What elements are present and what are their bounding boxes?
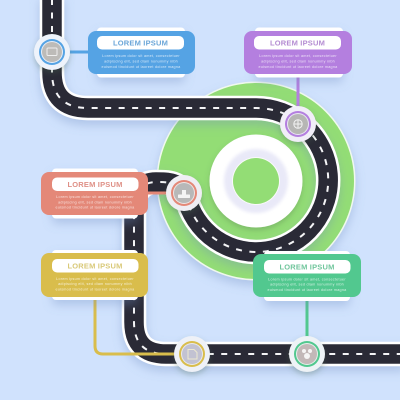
connector: green [306,295,308,346]
connector: blue [60,50,90,54]
panel: red [41,168,148,218]
panel: blue [88,28,195,78]
text block: Lorem ipsum dolor sit amet, consectetuer [102,54,180,58]
icon: document [188,350,197,359]
green island [156,82,356,280]
connector: purple [296,72,300,116]
text block: euismod tincidunt ut laoreet dolore magna [268,288,347,292]
text block: euismod tincidunt ut laoreet dolore magna [56,206,135,210]
heading: LOREM IPSUM [67,262,123,270]
text block [259,54,338,69]
heading: LOREM IPSUM [279,262,335,272]
node: red [166,175,202,211]
connector: yellow [95,295,184,354]
road [52,0,400,354]
node: green [289,336,325,372]
centre roundabout rings [210,134,302,228]
text block: adipiscing elit, sed diam nonummy nibh [270,282,344,286]
icon: globe [294,120,302,128]
text block [268,278,347,292]
connector: red [146,192,174,194]
panel: yellow [41,250,148,300]
heading: LOREM IPSUM [113,38,168,48]
text block: Lorem ipsum dolor sit amet, consectetuer [56,277,134,281]
text block [56,195,135,210]
text block: Lorem ipsum dolor sit amet, consectetuer [259,54,337,58]
text block [56,277,135,292]
icon: tray [178,190,190,198]
heading: LOREM IPSUM [67,180,123,189]
text block: Lorem ipsum dolor sit amet, consectetuer [268,278,346,282]
text block: Lorem ipsum dolor sit amet, consectetuer [56,195,134,199]
heading: LOREM IPSUM [270,38,325,48]
text block [102,54,181,69]
text block: euismod tincidunt ut laoreet dolore magna [56,288,135,292]
text block: euismod tincidunt ut laoreet dolore magna [259,65,338,69]
icon: people [302,349,312,359]
text block: adipiscing elit, sed diam nonummy nibh [58,200,132,204]
text block: euismod tincidunt ut laoreet dolore magna [102,65,181,69]
node: blue [34,34,70,70]
text block: adipiscing elit, sed diam nonummy nibh [58,282,132,286]
node: purple [280,106,316,142]
node: yellow [174,336,210,372]
text block: adipiscing elit, sed diam nonummy nibh [261,60,335,64]
panel: green [253,251,361,301]
text block: adipiscing elit, sed diam nonummy nibh [104,60,178,64]
icon: monitor [47,48,57,56]
panel: purple [244,28,352,78]
